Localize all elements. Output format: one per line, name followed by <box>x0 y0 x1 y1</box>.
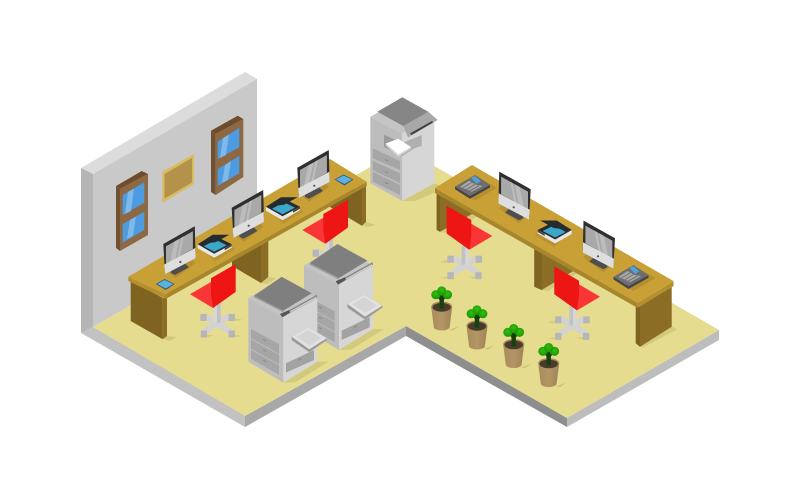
monitor 2 <box>232 190 264 242</box>
left desk <box>128 159 376 341</box>
window: right <box>211 116 243 195</box>
floor platform <box>81 148 719 427</box>
phone 1 <box>156 279 175 290</box>
monitor 4 <box>498 172 531 223</box>
desk phone 1 <box>455 175 497 201</box>
monitor 5 <box>583 221 615 272</box>
right chair 2 <box>547 266 600 340</box>
plant 2 <box>466 305 495 350</box>
right desk <box>435 165 677 347</box>
monitor 3 <box>297 150 330 202</box>
picture frame <box>162 154 194 203</box>
copier C, back <box>370 97 445 201</box>
back chair, left desk <box>302 200 355 273</box>
window: left <box>116 171 148 251</box>
right chair 1 <box>439 206 492 279</box>
phone 2 <box>334 174 354 186</box>
wall <box>81 72 257 333</box>
desk phone 2 <box>614 265 656 291</box>
left desk items <box>156 150 354 290</box>
monitor 1 <box>163 226 196 278</box>
copier B <box>304 244 384 350</box>
plant 3 <box>503 324 531 368</box>
copier A <box>248 277 328 383</box>
scanner 1 <box>198 235 235 261</box>
front chair, left desk <box>190 264 243 338</box>
plant 1 <box>431 286 459 330</box>
plant 4 <box>538 343 566 387</box>
scanner 2 <box>266 197 303 224</box>
scanner 3 <box>535 220 572 247</box>
